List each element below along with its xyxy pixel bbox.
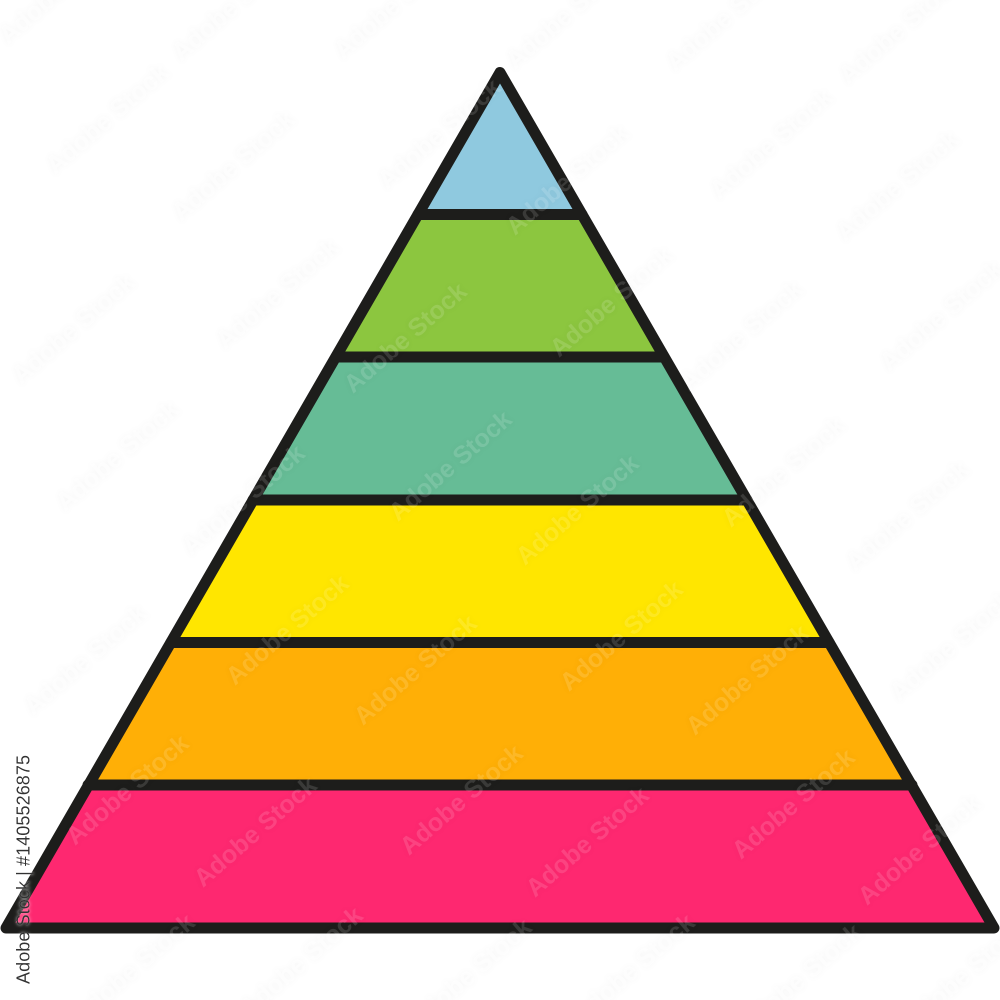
tier 6: pink base [6,785,994,928]
repeated Adobe Stock watermark: Adobe Stock [521,781,654,903]
repeated Adobe Stock watermark: Adobe Stock [177,439,310,561]
tier 1: blue apex [418,72,582,214]
repeated Adobe Stock watermark: Adobe Stock [339,277,472,399]
repeated Adobe Stock watermark: Adobe Stock [681,619,814,741]
repeated Adobe Stock watermark: Adobe Stock [395,739,528,861]
repeated Adobe Stock watermark: Adobe Stock [349,609,482,731]
tier 5: orange [88,642,912,785]
repeated Adobe Stock watermark: Adobe Stock [211,233,344,355]
repeated Adobe Stock watermark: Adobe Stock [727,743,860,865]
repeated Adobe Stock watermark: Adobe Stock [831,125,964,247]
repeated Adobe Stock watermark: Adobe Stock [705,83,838,205]
repeated Adobe Stock watermark: Adobe Stock [61,729,194,851]
repeated Adobe Stock watermark: Adobe Stock [545,241,678,363]
repeated Adobe Stock watermark: Adobe Stock [51,395,184,517]
tier 4: yellow [171,500,829,642]
repeated Adobe Stock watermark: Adobe Stock [7,268,140,390]
repeated Adobe Stock watermark: Adobe Stock [511,449,644,571]
repeated Adobe Stock watermark: Adobe Stock [717,411,850,533]
repeated Adobe Stock watermark: Adobe Stock [19,599,152,721]
repeated Adobe Stock watermark: Adobe Stock [167,105,300,227]
repeated Adobe Stock watermark: Adobe Stock [41,58,174,180]
repeated Adobe Stock watermark: Adobe Stock [675,275,808,397]
repeated Adobe Stock watermark: Adobe Stock [853,789,986,911]
repeated Adobe Stock watermark: Adobe Stock [189,771,322,893]
tier 2: green [336,214,664,357]
repeated Adobe Stock watermark: Adobe Stock [373,73,506,195]
stock id text: Adobe Stock | #1405526875 [14,755,34,984]
repeated Adobe Stock watermark: Adobe Stock [384,405,517,527]
repeated Adobe Stock watermark: Adobe Stock [501,119,634,241]
repeated Adobe Stock watermark: Adobe Stock [221,569,354,691]
tier 3: teal [253,357,747,500]
repeated Adobe Stock watermark: Adobe Stock [555,575,688,697]
repeated Adobe Stock watermark: Adobe Stock [841,455,974,577]
